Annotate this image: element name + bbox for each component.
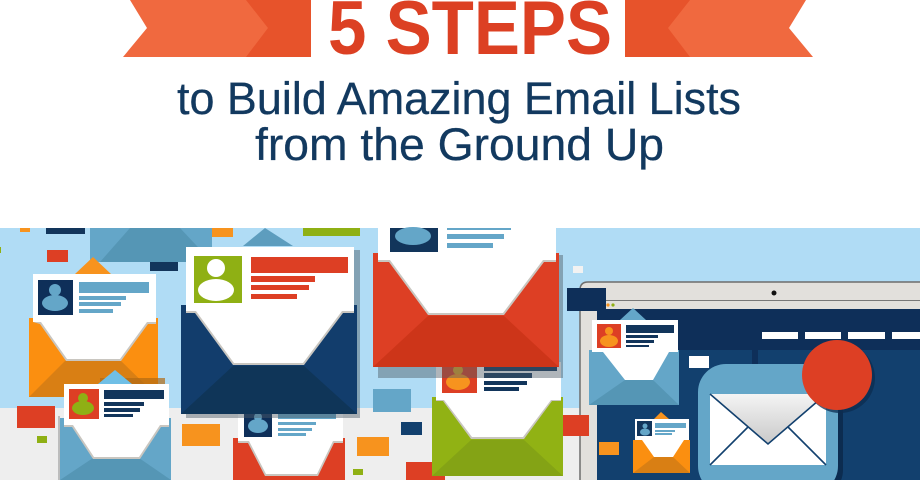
laptop: camera [772,290,776,296]
red tile on laptop edge [563,415,589,436]
laptop: browser bar line [597,300,920,301]
laptop: bezel [580,282,920,480]
orange tile [599,442,619,455]
envelope: green with red avatar [432,362,563,476]
envelope: large red with navy avatar [373,227,563,378]
white tile [689,356,709,368]
envelope: small orange on screen [633,412,690,473]
navy tile on laptop corner [567,288,606,311]
banner: right ribbon [625,0,813,57]
app icon: envelope [710,394,826,465]
envelope: large navy with green avatar [181,247,360,418]
laptop: screen [597,309,920,480]
laptop [580,282,920,480]
app icon: mail [698,364,843,480]
envelope: teal background [90,228,293,262]
subtitle: line one: to Build Amazing Email Lists [177,73,741,124]
envelope: bottom red with navy avatar [233,412,345,480]
laptop: nav buttons [762,332,920,339]
floating coloured tiles [0,228,583,480]
subtitle: line two: from the Ground Up [255,119,664,170]
background: sky and floor [0,228,920,480]
laptop: window dots [606,303,615,307]
envelope: small blue on screen [589,308,679,405]
envelope: orange with navy avatar [29,257,158,397]
envelope: light blue with red avatar [58,370,171,480]
notification badge [802,340,875,413]
banner: left ribbon [123,0,311,57]
